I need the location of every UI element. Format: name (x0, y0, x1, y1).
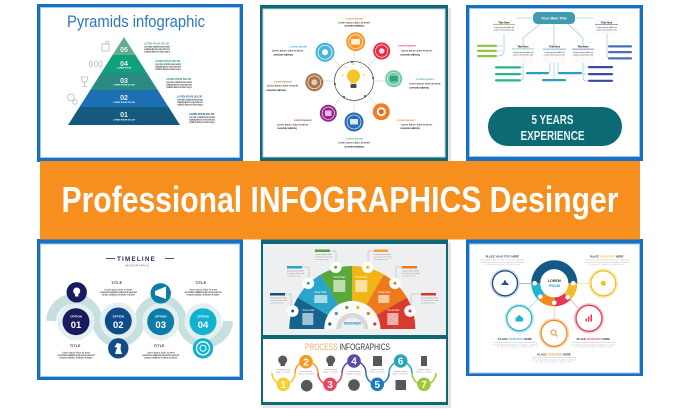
semicircle chart: DESIGNER (344, 322, 362, 326)
hub text labels: Lorem ipsum dolor sit amet consectetur adipiscing (493, 341, 537, 344)
hub text labels: PLACE YOUR TEXT HERE (537, 352, 571, 356)
org chart boxes: Lorem ipsum dolor sit (596, 26, 617, 29)
semicircle callout tags: Lorem ipsum dolor (287, 270, 304, 272)
hub text labels: Lorem ipsum dolor sit amet consectetur adipiscing (532, 356, 576, 359)
semicircle chart (287, 262, 416, 329)
hub text labels: elit sed do eiusmod tempor incididunt ut labore (532, 358, 577, 362)
hub text labels: et dolore magna aliqua enim (589, 263, 625, 266)
timeline option circles: 03 (155, 320, 166, 331)
semicircle callout tags: Lorem ipsum dolor (402, 270, 419, 272)
panel: pyramids infographic (37, 4, 243, 162)
banner (40, 161, 640, 240)
semicircle callout tags: consectetur (287, 274, 301, 278)
hub text labels: elit sed do eiusmod tempor incididunt ut labore (480, 261, 525, 264)
pyramid text blocks: adipiscing elit sed do eiusmod tempor (155, 66, 181, 68)
main title pill: Your Main Title (541, 16, 567, 20)
semicircle callout tags: consectetur (270, 302, 284, 304)
radial labels: consectetur adipiscing (266, 88, 286, 92)
process numbered circles: 2 (303, 357, 309, 368)
timeline titles and captions: TITLE (70, 344, 81, 348)
timeline option circles: OPTION (70, 314, 82, 318)
hub text labels: elit sed do eiusmod tempor incididunt ut labore (585, 261, 630, 264)
org chart boxes: Lorem ipsum dolor sit (513, 51, 533, 54)
pyramid text blocks: Lorem ipsum dolor sit amet consectetur (155, 63, 181, 66)
org chart boxes: Title Here (517, 46, 529, 48)
pyramid text blocks: incididunt ut labore et dolore magna (155, 68, 182, 71)
pyramid text blocks: LOREM IPSUM DOLOR (155, 61, 180, 63)
semicircle callout tags: consectetur (402, 274, 416, 278)
timeline titles and captions: TITLE (195, 281, 207, 285)
outer icon circles (491, 269, 617, 348)
hub text labels: elit sed do eiusmod tempor incididunt ut labore (493, 344, 538, 346)
semicircle callout tags: consectetur (374, 258, 388, 261)
process captions: Lorem ipsum (371, 368, 384, 371)
org chart boxes: amet consectetur elit (573, 54, 593, 56)
org chart boxes: Title Here (549, 46, 561, 48)
process captions: dolor sit amet (346, 372, 362, 376)
radial labels: Lorem Ipsum (397, 118, 415, 122)
radial labels (266, 16, 441, 149)
process numbered circles: 1 (281, 380, 287, 391)
hub text labels: PLACE YOUR TEXT HERE (577, 337, 610, 341)
pyramid text blocks: incididunt ut labore et dolore magna (177, 104, 204, 106)
timeline titles and captions: Lorem ipsum dolor sit amet (189, 288, 217, 292)
radial labels: Lorem Ipsum (274, 79, 292, 83)
semicircle chart: TITLE TEXT (333, 277, 346, 279)
radial labels: Lorem ipsum dolor sit amet, (401, 123, 433, 127)
org chart boxes: amet consectetur elit (494, 28, 514, 32)
pyramid chart: 01 (120, 112, 128, 119)
radial labels: consectetur adipiscing (273, 52, 293, 56)
process numbered circles: 5 (375, 380, 381, 391)
radial labels: consectetur adipiscing (400, 52, 420, 56)
timeline titles and captions: consectetur adipiscing elit sed do eiusmod (58, 354, 95, 357)
pyramid text blocks: LOREM IPSUM DOLOR (166, 79, 191, 81)
pyramid text blocks: LOREM IPSUM DOLOR (177, 96, 202, 98)
semicircle callout tags: Lorem ipsum dolor (270, 298, 287, 300)
semicircle callout tags: sit amet elit sed (270, 299, 287, 302)
process captions: dolor sit amet (276, 370, 291, 374)
process numbered circles: 7 (421, 380, 427, 391)
org chart boxes: Title Here (577, 46, 589, 48)
pyramid text blocks: Lorem ipsum dolor sit amet consectetur (177, 98, 203, 102)
hub text labels: Lorem ipsum dolor sit amet consectetur adipiscing (571, 341, 615, 344)
radial labels: Lorem Ipsum (346, 137, 364, 141)
pyramid text blocks: Lorem ipsum dolor sit amet consectetur (144, 46, 170, 48)
hub text labels: PLACE YOUR TEXT HERE (486, 255, 519, 259)
process captions: dolor sit amet (393, 372, 408, 376)
semicircle chart: TITLE TEXT (314, 292, 327, 294)
radial labels: consectetur adipiscing (277, 126, 297, 130)
semicircle chart: TITLE TEXT (378, 292, 391, 294)
hub connector lines (518, 283, 590, 320)
radial labels: Lorem ipsum dolor sit amet, (401, 48, 433, 52)
hub text labels: PLACE YOUR TEXT HERE (590, 255, 624, 259)
process dark icons (278, 356, 427, 392)
badge: 5 years experience (488, 107, 622, 146)
hub text labels (480, 255, 630, 364)
radial labels: Lorem Ipsum (398, 44, 416, 48)
timeline option circles (60, 305, 219, 338)
org chart list bars (477, 45, 632, 82)
process numbered circles (276, 354, 431, 391)
radial labels: consectetur adipiscing (344, 24, 365, 28)
pyramid side icons (68, 41, 109, 104)
timeline titles and captions: tempor incididunt ut labore et dolore (60, 356, 93, 360)
semicircle callout tags: sit amet elit sed (374, 256, 391, 258)
process captions: Lorem ipsum (394, 370, 407, 373)
semicircle callout tags: sit amet elit sed (421, 299, 438, 302)
pyramid text blocks: Lorem ipsum dolor sit amet consectetur (166, 81, 192, 84)
pyramid chart: 04 (120, 61, 128, 68)
timeline wave band (51, 299, 228, 343)
pyramid text blocks: incididunt ut labore et dolore magna (144, 50, 171, 54)
hub text labels: elit sed do eiusmod tempor incididunt ut labore (571, 344, 616, 346)
panel: circular hub infographic (466, 239, 643, 376)
process numbered circles: 4 (351, 357, 357, 368)
panel: org chart and experience badge (466, 5, 643, 161)
timeline titles and captions: consectetur adipiscing elit sed do eiusmod (100, 291, 138, 294)
timeline titles and captions: tempor incididunt ut labore et dolore (186, 294, 220, 296)
semicircle chart: TITLE TEXT (355, 277, 368, 279)
radial labels: Lorem Ipsum (416, 77, 434, 81)
semicircle callout tags: consectetur (421, 302, 435, 304)
central hub ring (536, 265, 573, 302)
pyramid text blocks: incididunt ut labore et dolore magna (189, 121, 216, 124)
process numbered circles: 3 (327, 380, 333, 391)
pyramid chart: LOREM IPSUM DOLOR (113, 120, 135, 122)
radial labels: Lorem Ipsum (290, 44, 308, 48)
pyramid text blocks: adipiscing elit sed do eiusmod tempor (144, 48, 170, 51)
pyramid chart: 02 (120, 95, 128, 102)
radial labels: Lorem ipsum dolor sit amet, (409, 81, 441, 85)
process captions: Lorem ipsum (418, 368, 431, 371)
pyramid chart: LOREM IPSUM (117, 68, 131, 70)
semicircle chart: TITLE TEXT (302, 310, 315, 312)
semicircle callout tags (270, 250, 438, 306)
panel: semicircle and process infographics (261, 239, 451, 408)
process captions: Lorem ipsum (324, 368, 337, 371)
radial labels: Lorem ipsum dolor sit amet, (272, 48, 304, 52)
org chart boxes: Title Here (601, 22, 613, 24)
process captions: dolor sit amet (370, 370, 385, 374)
radial labels: Lorem Ipsum (294, 118, 312, 122)
pyramid chart: 05 (120, 47, 128, 54)
radial labels: consectetur adipiscing (409, 86, 429, 90)
hub centre: LOREM (548, 279, 561, 283)
radial labels: Lorem Ipsum (346, 16, 364, 20)
timeline heading (106, 256, 174, 268)
org chart boxes: Title Here (498, 22, 510, 24)
radial labels: Lorem ipsum dolor sit amet, (338, 141, 371, 145)
hub text labels: et dolore magna aliqua enim (536, 360, 572, 364)
hub text labels: PLACE YOUR TEXT HERE (498, 337, 532, 341)
timeline titles and captions: tempor incididunt ut labore et dolore (144, 356, 178, 360)
org chart boxes: Lorem ipsum dolor sit (494, 26, 514, 29)
org chart boxes: amet consectetur elit (513, 54, 533, 56)
pyramid text blocks: adipiscing elit sed do eiusmod tempor (166, 84, 192, 86)
hub text labels: Lorem ipsum dolor sit amet consectetur adipiscing (480, 258, 524, 262)
semicircle callout tags: sit amet elit sed (402, 272, 419, 275)
process wave (272, 361, 436, 385)
pyramid text blocks: incididunt ut labore et dolore magna (166, 86, 193, 89)
timeline heading: INFOGRAPHIC (125, 264, 150, 268)
timeline icons (66, 282, 213, 358)
hub text labels: et dolore magna aliqua enim (575, 346, 612, 348)
semicircle chart: TITLE TEXT (387, 310, 400, 312)
timeline titles and captions: consectetur adipiscing elit sed do eiusmod (184, 291, 222, 294)
radial labels: consectetur adipiscing (400, 126, 420, 130)
timeline option circles: 04 (198, 320, 209, 331)
radial labels: consectetur adipiscing (344, 145, 365, 149)
pyramid chart: 03 (120, 78, 128, 85)
hub dots (532, 281, 576, 305)
pyramid text blocks: LOREM IPSUM DOLOR (189, 114, 214, 116)
process numbered circles: 6 (398, 357, 404, 368)
panel: timeline infographic (37, 239, 243, 380)
panel: light bulb radial infographic (260, 5, 451, 161)
pyramid chart (68, 37, 180, 125)
hub text labels: et dolore magna aliqua enim (497, 346, 533, 348)
timeline option circles: 01 (71, 320, 82, 331)
semicircle callout tags: sit amet elit sed (315, 256, 332, 258)
process captions: dolor sit amet (298, 372, 314, 376)
hub text labels: Lorem ipsum dolor sit amet consectetur adipiscing (585, 258, 629, 262)
semicircle callout tags: Lorem ipsum dolor (315, 254, 332, 256)
pyramid text blocks: adipiscing elit sed do eiusmod tempor (177, 101, 203, 104)
semicircle callout tags: sit amet elit sed (287, 272, 304, 275)
process captions: Lorem ipsum (276, 368, 290, 371)
process captions: dolor sit amet (323, 370, 338, 374)
semicircle callout tags: consectetur (315, 258, 329, 261)
radial labels: Lorem ipsum dolor sit amet, (338, 20, 371, 24)
badge: 5 years experience: EXPERIENCE (520, 128, 585, 143)
process captions: Lorem ipsum (348, 370, 361, 373)
timeline option circles: OPTION (155, 314, 166, 318)
timeline titles and captions: tempor incididunt ut labore et dolore (102, 294, 136, 296)
radial labels: Lorem ipsum dolor sit amet, (277, 122, 309, 126)
org chart connectors (497, 18, 608, 81)
radial icon circles (305, 32, 402, 132)
pyramid chart: LOREM IPSUM DOLOR (113, 102, 135, 104)
central ring and bulb (323, 51, 385, 113)
heading: pyramids: Pyramids infographic (67, 13, 205, 31)
hub centre (540, 269, 568, 297)
hub text labels: et dolore magna aliqua enim (484, 263, 521, 266)
semicircle callout tags: Lorem ipsum dolor (421, 298, 438, 300)
process heading: PROCESS INFOGRAPHICS (305, 342, 390, 352)
main title pill (533, 12, 575, 24)
timeline titles and captions: consectetur adipiscing elit sed do eiusmod (142, 354, 180, 357)
process captions (276, 368, 432, 376)
pyramid text blocks: Lorem ipsum dolor sit amet consectetur (189, 116, 215, 119)
org chart boxes: Lorem ipsum dolor sit (573, 51, 593, 54)
outer icons (501, 280, 606, 336)
timeline titles and captions: Lorem ipsum dolor sit amet (147, 352, 175, 354)
pyramid text blocks: LOREM IPSUM DOLOR (144, 44, 169, 46)
radial labels: Lorem ipsum dolor sit amet, (267, 84, 299, 88)
timeline heading: TIMELINE (117, 256, 156, 263)
org chart boxes: amet consectetur elit (544, 54, 565, 56)
badge: 5 years experience: 5 YEARS (532, 112, 574, 127)
timeline titles and captions: TITLE (154, 344, 165, 348)
hub centre: IPSUM (549, 284, 560, 288)
timeline titles and captions (58, 281, 222, 360)
process captions: Lorem ipsum (300, 370, 313, 373)
pyramid text blocks: adipiscing elit sed do eiusmod tempor (189, 118, 215, 122)
org chart boxes: amet consectetur elit (596, 28, 617, 32)
timeline option circles: OPTION (113, 314, 124, 318)
semicircle callout tags: Lorem ipsum dolor (374, 254, 391, 256)
pyramid text blocks (144, 44, 216, 124)
timeline titles and captions: Lorem ipsum dolor sit amet (104, 288, 133, 292)
timeline titles and captions: Lorem ipsum dolor sit amet (62, 352, 90, 354)
pyramid chart: LOREM IPSUM DOLOR (113, 84, 135, 86)
timeline option circles: 02 (113, 320, 124, 331)
process captions: dolor sit amet (416, 370, 432, 374)
org chart boxes: Lorem ipsum dolor sit (544, 51, 565, 54)
org chart boxes (493, 19, 618, 63)
timeline titles and captions: TITLE (111, 281, 123, 285)
timeline option circles: OPTION (197, 314, 209, 318)
